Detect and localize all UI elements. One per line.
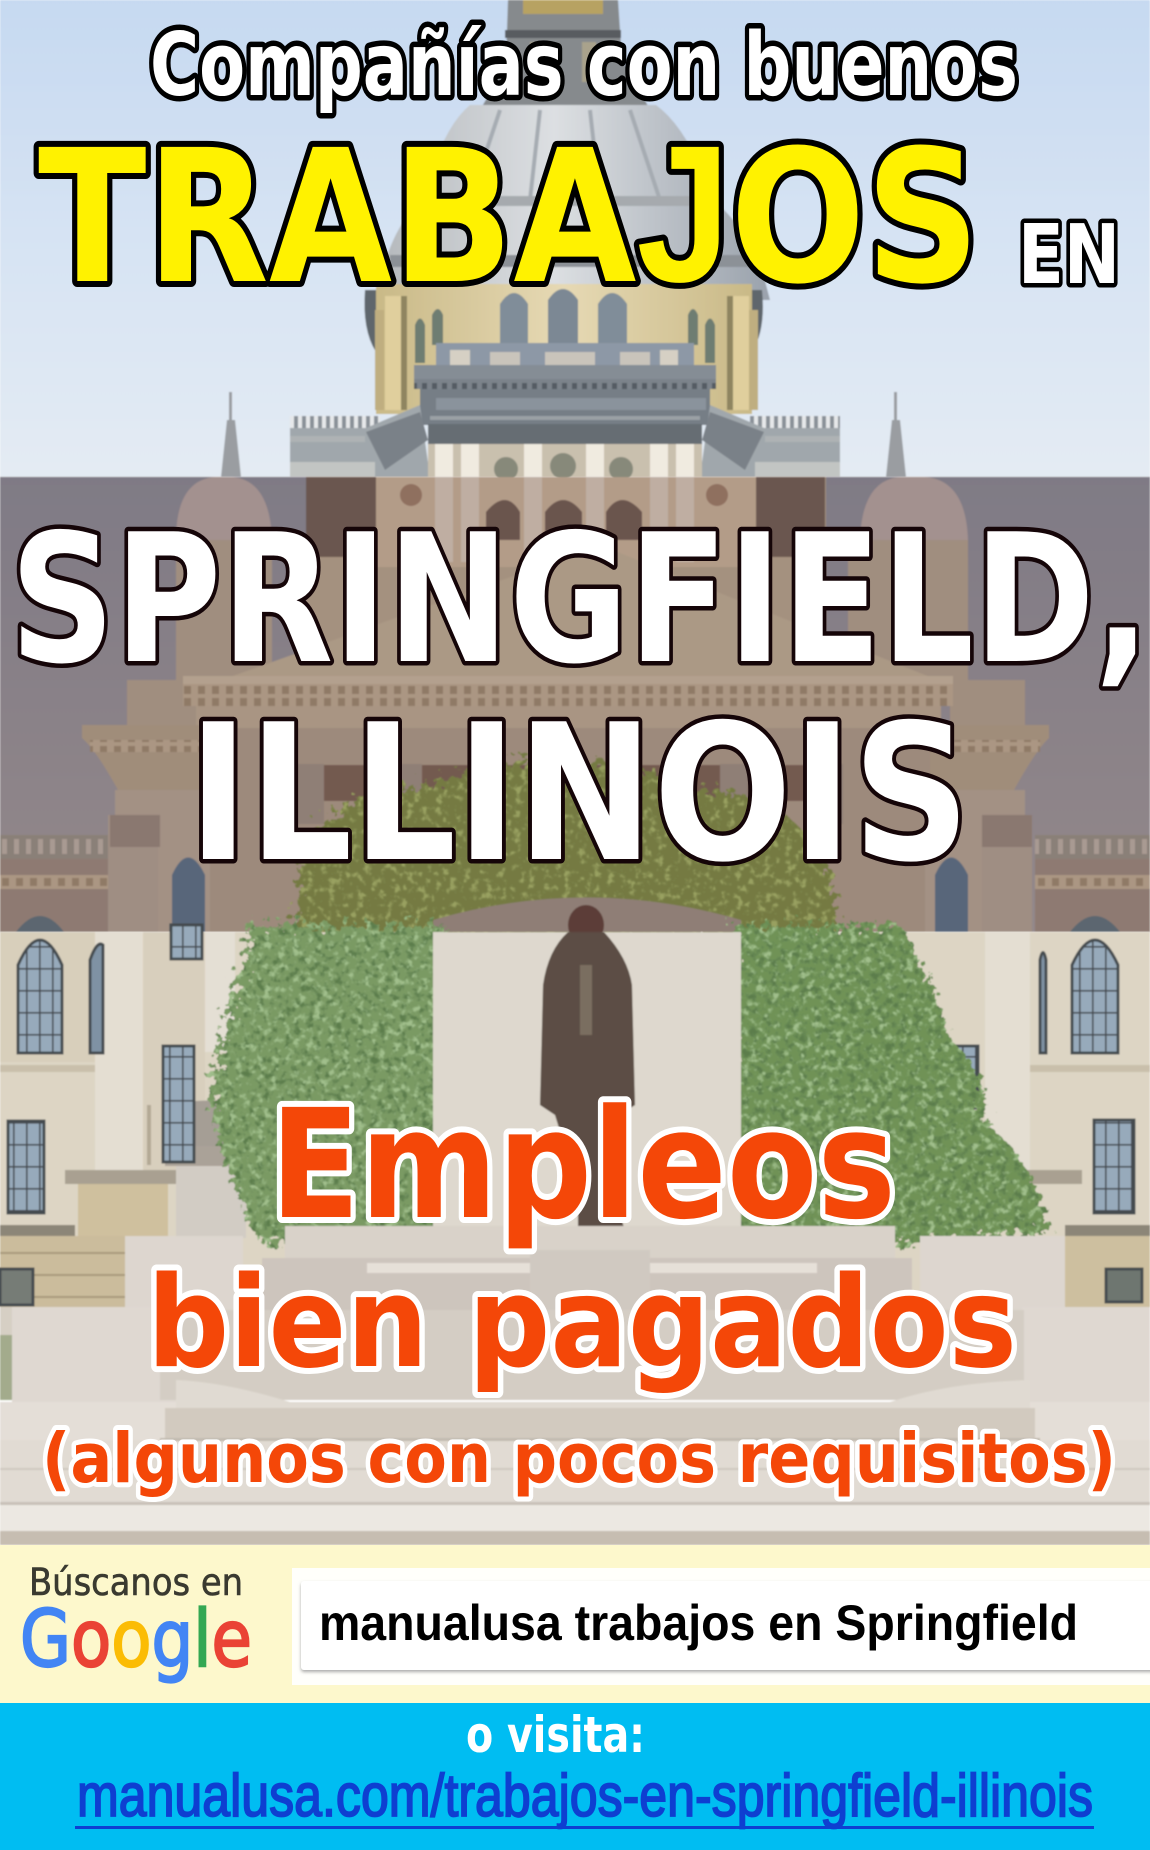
- side towers: [127, 540, 1025, 730]
- heading: ILLINOIS: ILLINOIS: [188, 684, 970, 904]
- drum of the dome: [364, 284, 763, 414]
- heading: Empleos: Empleos: [270, 1077, 896, 1253]
- title: TRABAJOS: TRABAJOS: [38, 105, 980, 325]
- label: Búscanos en: Búscanos en: [29, 1561, 243, 1604]
- small domes: [176, 477, 272, 540]
- statue head: [568, 905, 604, 945]
- central gable: [183, 545, 953, 728]
- grey curved roofs: [290, 405, 840, 477]
- trees in the band: [295, 759, 840, 940]
- lower facade: [0, 932, 1150, 1312]
- columns and wall: [115, 728, 1025, 932]
- stone stairs and base: [0, 1226, 1150, 1545]
- dome: [378, 105, 770, 300]
- pavilion cornices: [82, 725, 1049, 790]
- logo: Google: Google: [20, 1595, 252, 1685]
- heading: bien pagados: bien pagados: [147, 1249, 1017, 1396]
- upper columns: [428, 424, 702, 481]
- text: o visita: o visita:: [466, 1706, 645, 1764]
- panel: google search strip: [0, 1545, 1150, 1703]
- panel: white search area: [292, 1568, 1150, 1685]
- spires: [221, 392, 906, 477]
- title: EN: EN: [1018, 208, 1120, 303]
- balustrade and gallery: [414, 343, 716, 425]
- search text: manualusa trabajos en Springfield: [319, 1595, 1078, 1651]
- stone monument: [433, 932, 741, 1240]
- dome lantern: [480, 0, 650, 110]
- monument top: [433, 898, 741, 932]
- side wings: [0, 815, 1150, 932]
- background photo: Illinois State Capitol: [0, 0, 1150, 481]
- dark translucent band: [0, 477, 1150, 945]
- trees: [210, 925, 1050, 1255]
- central upper building: [306, 477, 826, 682]
- search box: [301, 1581, 1150, 1670]
- panel: blue footer: [0, 1703, 1150, 1850]
- lincoln statue: [540, 932, 635, 1250]
- windows: [0, 925, 1142, 1305]
